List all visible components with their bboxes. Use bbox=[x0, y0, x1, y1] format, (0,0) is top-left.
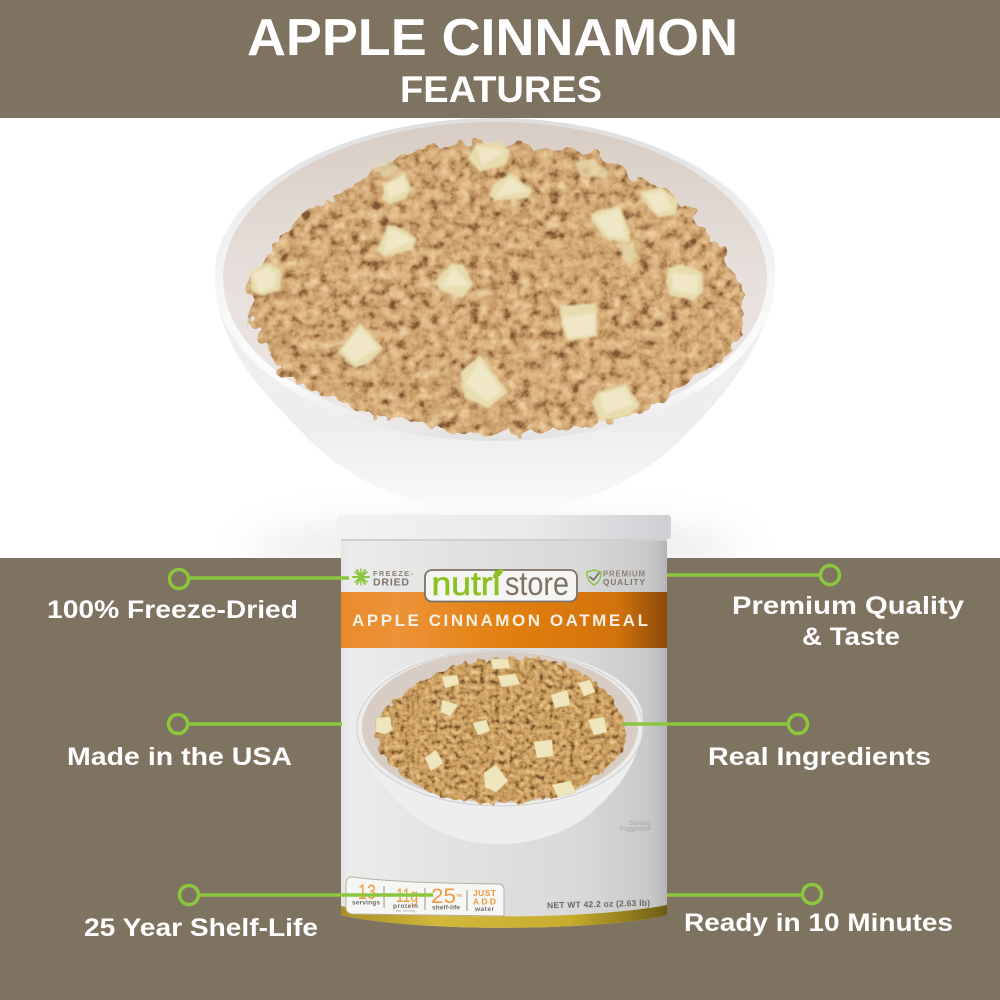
serving suggestion note: Serving bbox=[629, 820, 651, 827]
title: FEATURES bbox=[400, 69, 602, 110]
callout: Premium Quality & Taste: Premium Quality bbox=[732, 592, 964, 620]
orange band bbox=[341, 592, 667, 648]
callout: Ready in 10 Minutes: Ready in 10 Minutes bbox=[684, 909, 953, 937]
gold can base bbox=[341, 905, 667, 928]
premium quality badge: QUALITY bbox=[603, 578, 646, 587]
can body bbox=[341, 539, 667, 928]
can bowl interior bbox=[362, 651, 638, 803]
icon: shield check bbox=[587, 570, 601, 585]
can lid bbox=[337, 515, 671, 539]
logo: nutristore: nutri bbox=[432, 565, 500, 602]
bowl of oatmeal bbox=[215, 118, 775, 578]
can bowl rim bbox=[357, 650, 643, 806]
callout: Made in the USA bbox=[67, 714, 342, 771]
white photo area bbox=[0, 118, 1000, 558]
icon: snowflake bbox=[353, 569, 369, 585]
can bowl image bbox=[357, 650, 643, 844]
callout: 100% Freeze-Dried bbox=[47, 570, 349, 624]
freeze-dried badge: DRIED bbox=[373, 576, 409, 588]
callout: 25 Year Shelf-Life: 25 Year Shelf-Life bbox=[84, 914, 318, 942]
nutrition facts panel: Per Serving bbox=[396, 909, 415, 913]
bowl rim bbox=[215, 118, 775, 441]
nutrition facts panel bbox=[346, 877, 504, 916]
can oats bbox=[376, 658, 627, 802]
serving suggestion note bbox=[619, 820, 652, 832]
nutrition facts panel: JUST bbox=[473, 888, 497, 898]
callout: Real Ingredients: Real Ingredients bbox=[708, 743, 931, 771]
serving suggestion note: Suggestion bbox=[619, 826, 652, 832]
nutrition facts panel: 25 bbox=[431, 885, 456, 908]
logo: nutristore bbox=[425, 565, 577, 602]
logo: nutristore: store bbox=[505, 565, 569, 602]
bowl body bbox=[215, 118, 775, 512]
title: APPLE CINNAMON bbox=[247, 9, 738, 67]
callout: Premium Quality & Taste: & Taste bbox=[802, 623, 900, 651]
callout: 25 Year Shelf-Life bbox=[84, 886, 433, 942]
nutrition facts panel: 13 bbox=[358, 881, 376, 904]
product can bbox=[337, 515, 671, 928]
premium quality badge: PREMIUM bbox=[603, 570, 645, 578]
title bbox=[247, 9, 738, 110]
nutrition facts panel: YR bbox=[456, 893, 463, 898]
freeze-dried badge: FREEZE- bbox=[373, 569, 414, 578]
callout: Made in the USA: Made in the USA bbox=[67, 743, 292, 771]
oats bbox=[250, 143, 745, 433]
nutrition facts panel: ADD bbox=[473, 896, 496, 906]
nutrition facts panel: protein bbox=[393, 903, 418, 910]
callout: Ready in 10 Minutes bbox=[667, 884, 953, 937]
nutrition facts panel: servings bbox=[352, 900, 380, 906]
can bowl body bbox=[357, 650, 643, 844]
icon: leaf bbox=[493, 569, 503, 578]
net weight: NET WT 42.2 oz (2.63 lb) bbox=[547, 898, 650, 910]
callout: 100% Freeze-Dried: 100% Freeze-Dried bbox=[47, 596, 298, 624]
callout: Premium Quality & Taste bbox=[667, 566, 964, 651]
freeze-dried badge bbox=[353, 569, 414, 588]
bowl shadow bbox=[263, 514, 727, 558]
nutrition facts panel: shelf-life bbox=[432, 904, 460, 912]
premium quality badge bbox=[587, 570, 646, 587]
product name: APPLE CINNAMON OATMEAL bbox=[352, 611, 648, 630]
bowl interior bbox=[223, 122, 767, 434]
apple chunks bbox=[250, 142, 703, 421]
can apple chunks bbox=[376, 659, 607, 797]
nutrition facts panel: water bbox=[474, 906, 494, 913]
callout: Real Ingredients bbox=[622, 714, 931, 771]
nutrition facts panel: 11g bbox=[396, 886, 418, 907]
